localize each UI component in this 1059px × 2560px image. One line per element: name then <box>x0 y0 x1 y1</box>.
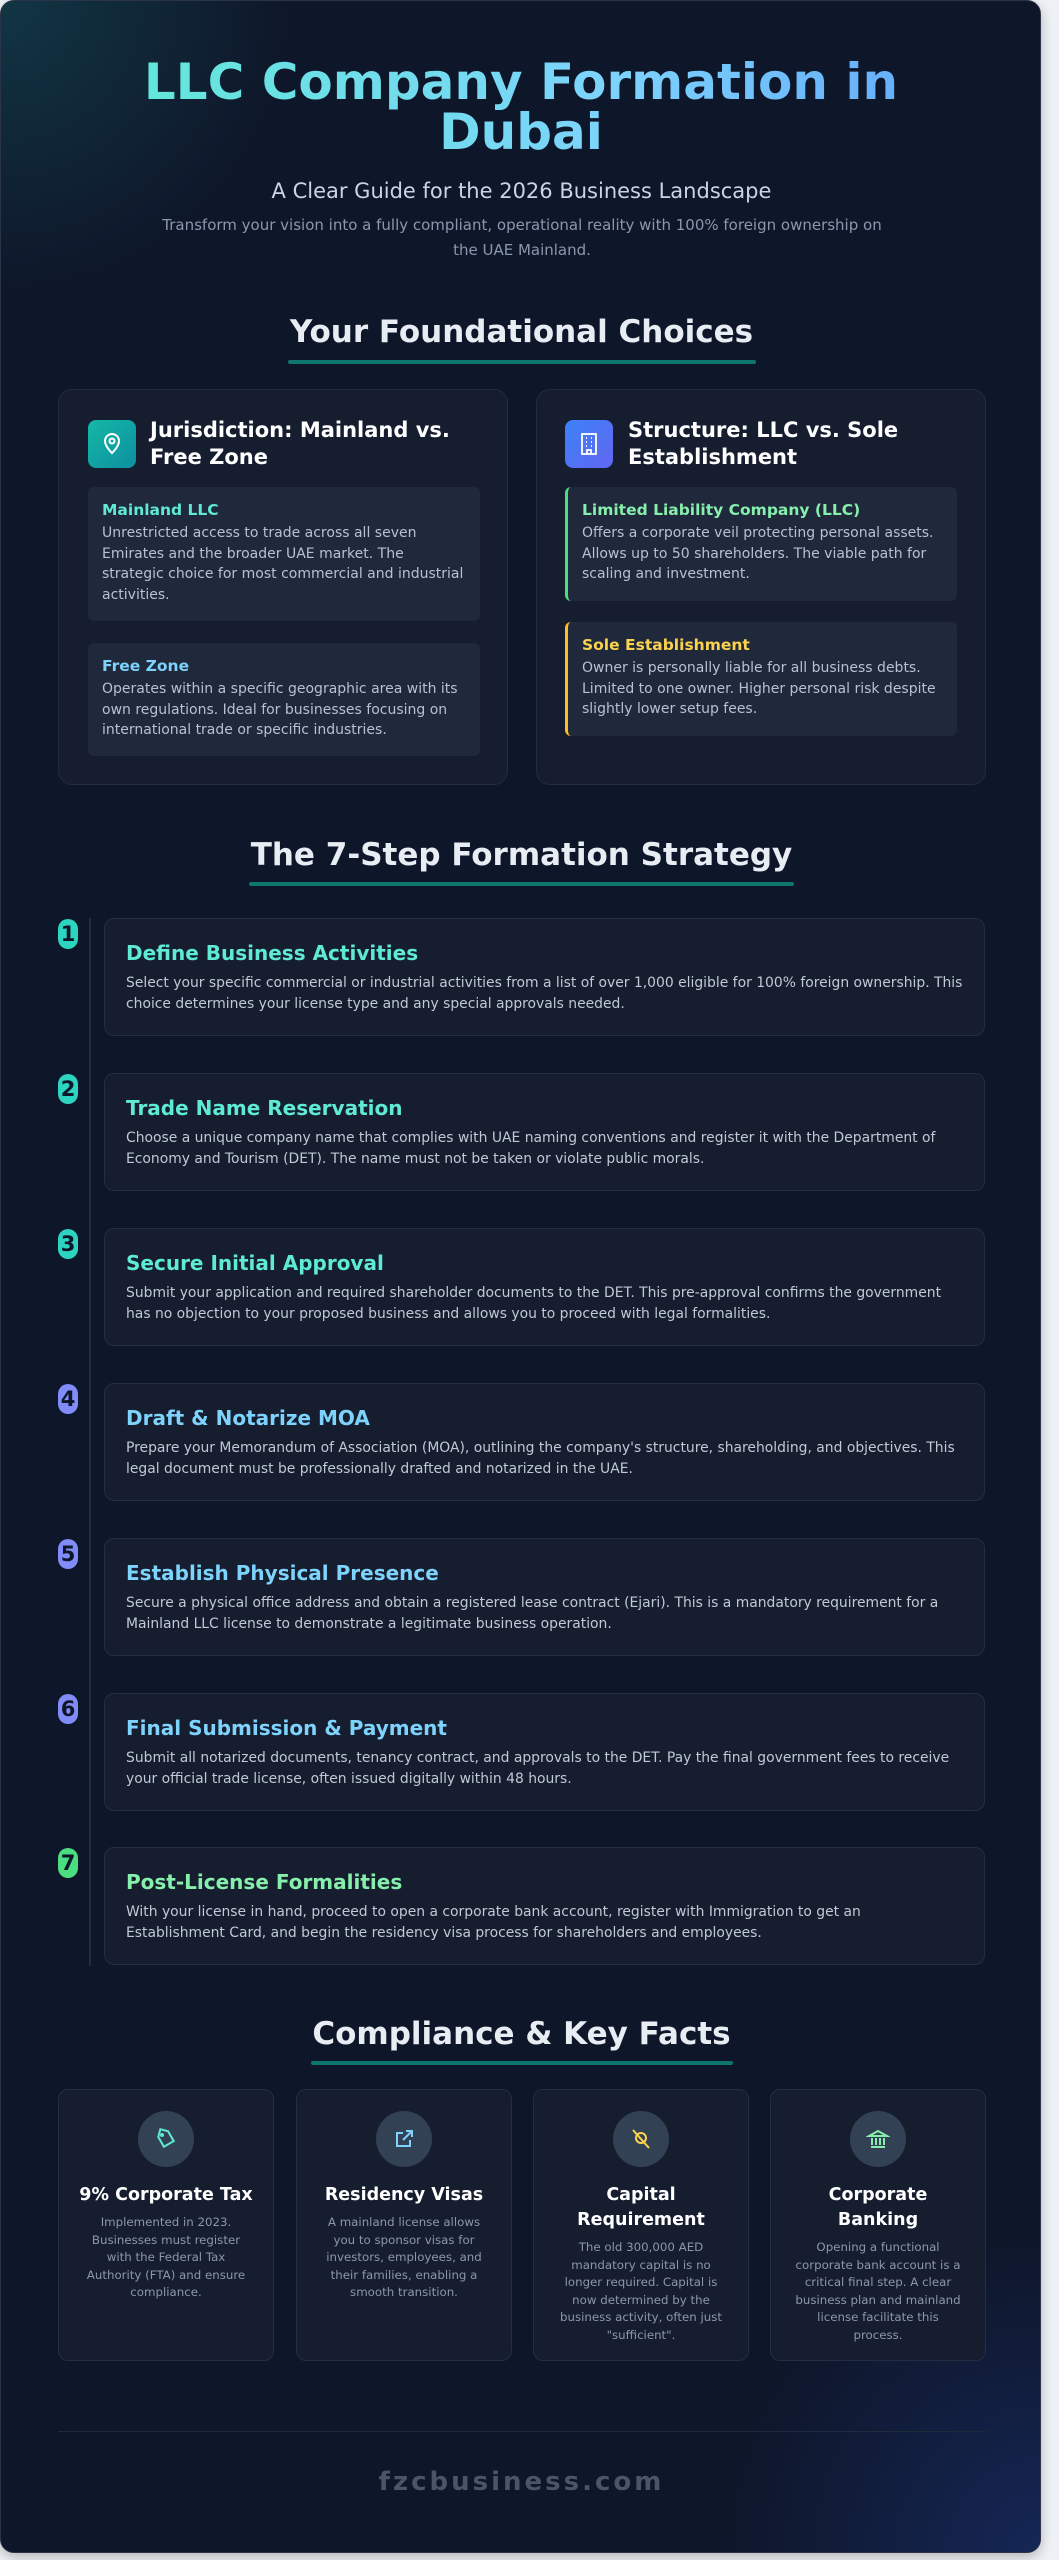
panel: structure <box>536 389 986 785</box>
description: Transform your vision into a fully compliant, operational reality with 100% foreign ownership on <box>162 216 882 234</box>
sub-box: mainland: Unrestricted access to trade across all seven Emirates and the broader UAE market. The strategic choice for most commercial and industrial activities. <box>102 525 463 603</box>
icon: external link <box>376 2111 432 2167</box>
heading: 7 steps: The 7-Step Formation Strategy <box>251 837 792 873</box>
sub-box: sole <box>565 622 957 736</box>
icon: location pin <box>88 420 136 468</box>
fact: visas: A mainland license allows you to sponsor visas for investors, employees, and their families, enabling a smooth transition. <box>326 2215 482 2299</box>
step 4 <box>58 1383 985 1501</box>
icon: tag <box>138 2111 194 2167</box>
fact: capital: Capital Requirement <box>577 2185 705 2230</box>
step 2 <box>58 1073 985 1191</box>
heading: foundational choices: Your Foundational Choices <box>290 314 753 350</box>
title: Dubai <box>439 103 603 161</box>
step 5: Establish Physical Presence <box>126 1561 439 1585</box>
step 1: 1 <box>61 922 75 946</box>
icon: no coin <box>613 2111 669 2167</box>
step 1 <box>58 918 985 1036</box>
fact: corporate tax <box>58 2089 274 2361</box>
step 6 <box>58 1693 985 1811</box>
step 1: Define Business Activities <box>126 941 418 965</box>
sub-box: sole: Sole Establishment <box>582 636 750 654</box>
sub-box: free zone <box>88 643 480 756</box>
sub-box: mainland <box>88 487 480 621</box>
sub-box: LLC: Limited Liability Company (LLC) <box>582 501 860 519</box>
step 3 <box>58 1228 985 1346</box>
description: the UAE Mainland. <box>453 241 591 259</box>
fact: capital: The old 300,000 AED mandatory capital is no longer required. Capital is now determined by the business activity, often just "sufficient". <box>560 2240 722 2342</box>
step 5: Secure a physical office address and obtain a registered lease contract (Ejari). This is a mandatory requirement for a Mainland LLC license to demonstrate a legitimate business operation. <box>126 1595 938 1632</box>
heading: compliance: Compliance & Key Facts <box>312 2016 731 2052</box>
fact: visas <box>296 2089 512 2361</box>
step 4: 4 <box>61 1387 75 1411</box>
sub-box: sole: Owner is personally liable for all business debts. Limited to one owner. Higher personal risk despite slightly lower setup fees. <box>582 660 936 717</box>
fact: banking: Corporate <box>829 2185 927 2205</box>
step 6: 6 <box>61 1697 75 1721</box>
footer: fzcbusiness.com <box>379 2467 664 2497</box>
description <box>162 216 882 259</box>
fact: capital <box>533 2089 749 2361</box>
title <box>61 57 981 157</box>
fact: corporate tax: Implemented in 2023. Businesses must register with the Federal Tax Authority (FTA) and ensure compliance. <box>87 2215 245 2299</box>
step 4: Prepare your Memorandum of Association (MOA), outlining the company's structure, shareholding, and objectives. This legal document must be professionally drafted and notarized in the UAE. <box>126 1440 955 1477</box>
step 2: 2 <box>61 1077 75 1101</box>
step 5 <box>58 1538 985 1656</box>
sub-box: mainland: Mainland LLC <box>102 501 219 519</box>
step 1: Select your specific commercial or industrial activities from a list of over 1,000 eligible for 100% foreign ownership. This choice determines your license type and any special approvals needed. <box>126 975 962 1012</box>
sub-box: free zone: Operates within a specific geographic area with its own regulations. Ideal for businesses focusing on international trade or specific industries. <box>102 681 458 738</box>
title: LLC Company Formation in <box>144 53 898 111</box>
sub-box: LLC <box>565 487 957 601</box>
step 5: 5 <box>61 1542 75 1566</box>
step 2: Trade Name Reservation <box>126 1096 402 1120</box>
subtitle: A Clear Guide for the 2026 Business Landscape <box>272 179 771 203</box>
panel heading: Jurisdiction: Mainland vs. Free Zone <box>150 418 450 469</box>
step 7: Post-License Formalities <box>126 1870 402 1894</box>
fact: banking: Opening a functional corporate bank account is a critical final step. A clear business plan and mainland license facilitate this process. <box>795 2240 961 2342</box>
step 3: Submit your application and required shareholder documents to the DET. This pre-approval confirms the government has no objection to your proposed business and allows you to proceed with legal formalities. <box>126 1285 941 1322</box>
icon: bank <box>850 2111 906 2167</box>
step 7 <box>58 1847 985 1965</box>
sub-box: LLC: Offers a corporate veil protecting personal assets. Allows up to 50 shareholders. The viable path for scaling and investment. <box>582 525 934 582</box>
step 3: 3 <box>61 1232 75 1256</box>
icon: building <box>565 420 613 468</box>
fact: banking <box>770 2089 986 2361</box>
step 2: Choose a unique company name that complies with UAE naming conventions and register it with the Department of Economy and Tourism (DET). The name must not be taken or violate public morals. <box>126 1130 935 1167</box>
panel: jurisdiction <box>58 389 508 785</box>
fact: banking: Banking <box>838 2210 918 2230</box>
step 4: Draft & Notarize MOA <box>126 1406 370 1430</box>
step 7: With your license in hand, proceed to open a corporate bank account, register with Immigration to get an <box>126 1904 861 1920</box>
step 3: Secure Initial Approval <box>126 1251 384 1275</box>
step 6: Submit all notarized documents, tenancy contract, and approvals to the DET. Pay the final government fees to receive your official trade license, often issued digitally within 48 hours. <box>126 1750 949 1787</box>
fact: corporate tax: 9% Corporate Tax <box>79 2185 253 2205</box>
fact: visas: Residency Visas <box>325 2185 483 2205</box>
step 6: Final Submission & Payment <box>126 1716 447 1740</box>
panel heading: Structure: LLC vs. Sole Establishment <box>628 418 898 469</box>
sub-box: free zone: Free Zone <box>102 657 189 675</box>
step 7: Establishment Card, and begin the residency visa process for shareholders and employees. <box>126 1925 762 1941</box>
step 7: 7 <box>61 1851 75 1875</box>
